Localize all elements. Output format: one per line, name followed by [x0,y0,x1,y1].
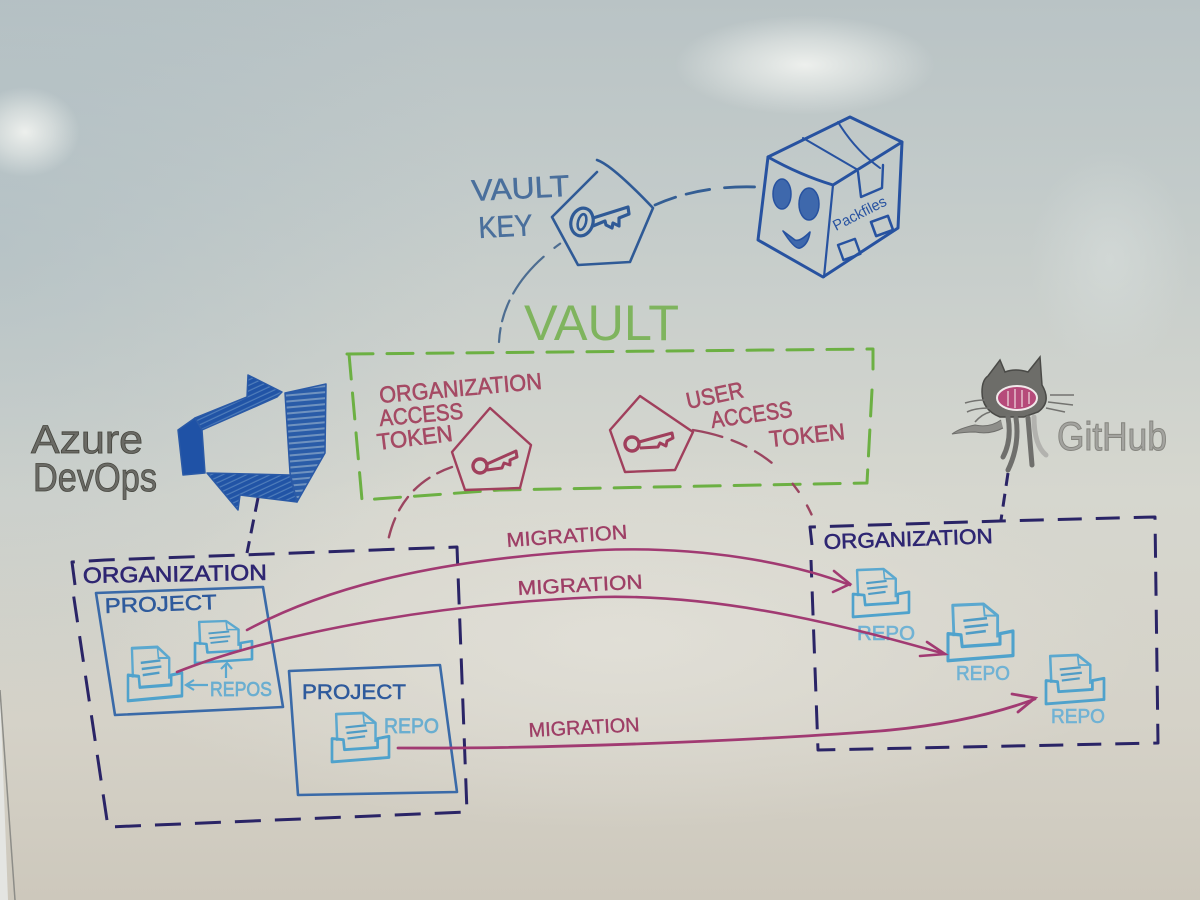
repo label: REPO [956,663,1010,685]
icon: github octocat [952,357,1074,470]
vault key label [471,170,570,245]
migration label: MIGRATION [517,571,643,600]
icon: vault key pentagon [552,160,653,265]
organization access token label: ACCESS [378,398,464,431]
icon: repo [128,647,182,701]
azure organization label: ORGANIZATION [83,560,267,588]
panel: project one [96,587,283,715]
icon: repo [195,621,252,663]
arrow: migration three [398,694,1035,748]
project two label: PROJECT [302,681,406,704]
connector: vault to vault key [499,243,561,342]
migration label: MIGRATION [528,714,640,742]
vault key label: VAULT [471,170,570,208]
project one label: PROJECT [104,591,217,618]
icon: repo [853,569,909,617]
azure devops label: Azure [31,418,143,462]
organization access token label: TOKEN [375,420,454,455]
icon: repo [1046,655,1104,704]
icon: repo [332,713,389,762]
connector: organization token to organization [388,467,452,541]
icon: packfiles box with face [758,117,902,277]
repo label: REPO [857,623,915,645]
connector: azure devops to organization [247,498,258,553]
user access token label [684,376,846,452]
icon: packfiles box with face: Packfiles [830,193,889,235]
repo label: REPO [1051,706,1105,728]
connector: github to organization [1001,473,1008,520]
icon: repo [948,604,1013,661]
github label: GitHub [1057,415,1167,459]
repos label: REPOS [210,679,272,701]
panel: project two [289,665,457,795]
azure devops label [31,418,157,500]
vault title: VAULT [524,295,679,351]
connector: vault key to packfiles [655,187,757,205]
panel: vault dashed box [347,349,873,500]
connector: user token to organization [693,430,816,525]
icon: user token pentagon [610,396,693,472]
organization access token label [375,368,543,455]
arrow: repos pointers [186,663,232,690]
icon: organization token pentagon [452,408,531,490]
azure devops label: DevOps [33,456,157,500]
github organization label: ORGANIZATION [823,525,993,554]
arrow: migration two [177,571,945,672]
user access token label: TOKEN [768,418,846,452]
vault key label: KEY [478,209,533,245]
arrow: migration one [247,522,850,630]
organization access token label: ORGANIZATION [378,368,543,408]
panel: azure organization dashed box [72,547,467,827]
user access token label: USER [684,376,746,414]
user access token label: ACCESS [709,396,794,433]
repo label: REPO [384,715,439,738]
icon: azure devops logo [178,375,326,510]
panel: github organization dashed box [810,517,1158,750]
migration label: MIGRATION [506,522,628,552]
